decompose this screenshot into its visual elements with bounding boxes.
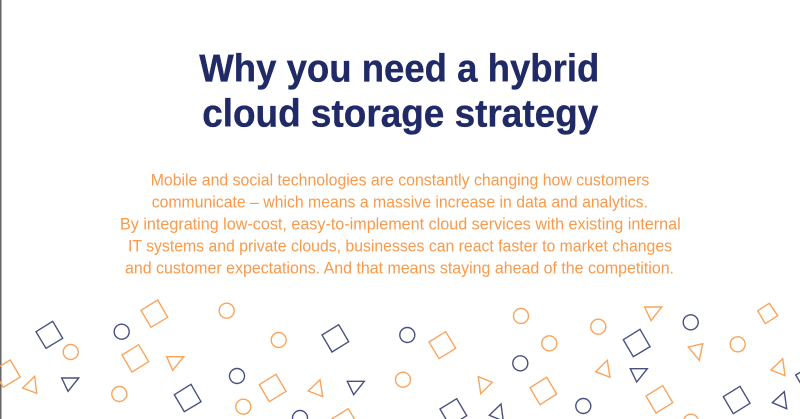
- body text: IT systems and private clouds, businesses can react faster to market changes: [128, 237, 672, 256]
- title: cloud storage strategy: [202, 92, 599, 135]
- body text: and customer expectations. And that means staying ahead of the competition.: [125, 258, 674, 277]
- title: Why you need a hybrid: [199, 48, 599, 91]
- decorative geometric shapes: [0, 300, 800, 419]
- body text: communicate – which means a massive increase in data and analytics.: [152, 192, 648, 211]
- body text: [120, 171, 681, 277]
- title: [199, 48, 599, 135]
- body text: Mobile and social technologies are constantly changing how customers: [151, 171, 649, 190]
- body text: By integrating low-cost, easy-to-implement cloud services with existing internal: [120, 214, 681, 233]
